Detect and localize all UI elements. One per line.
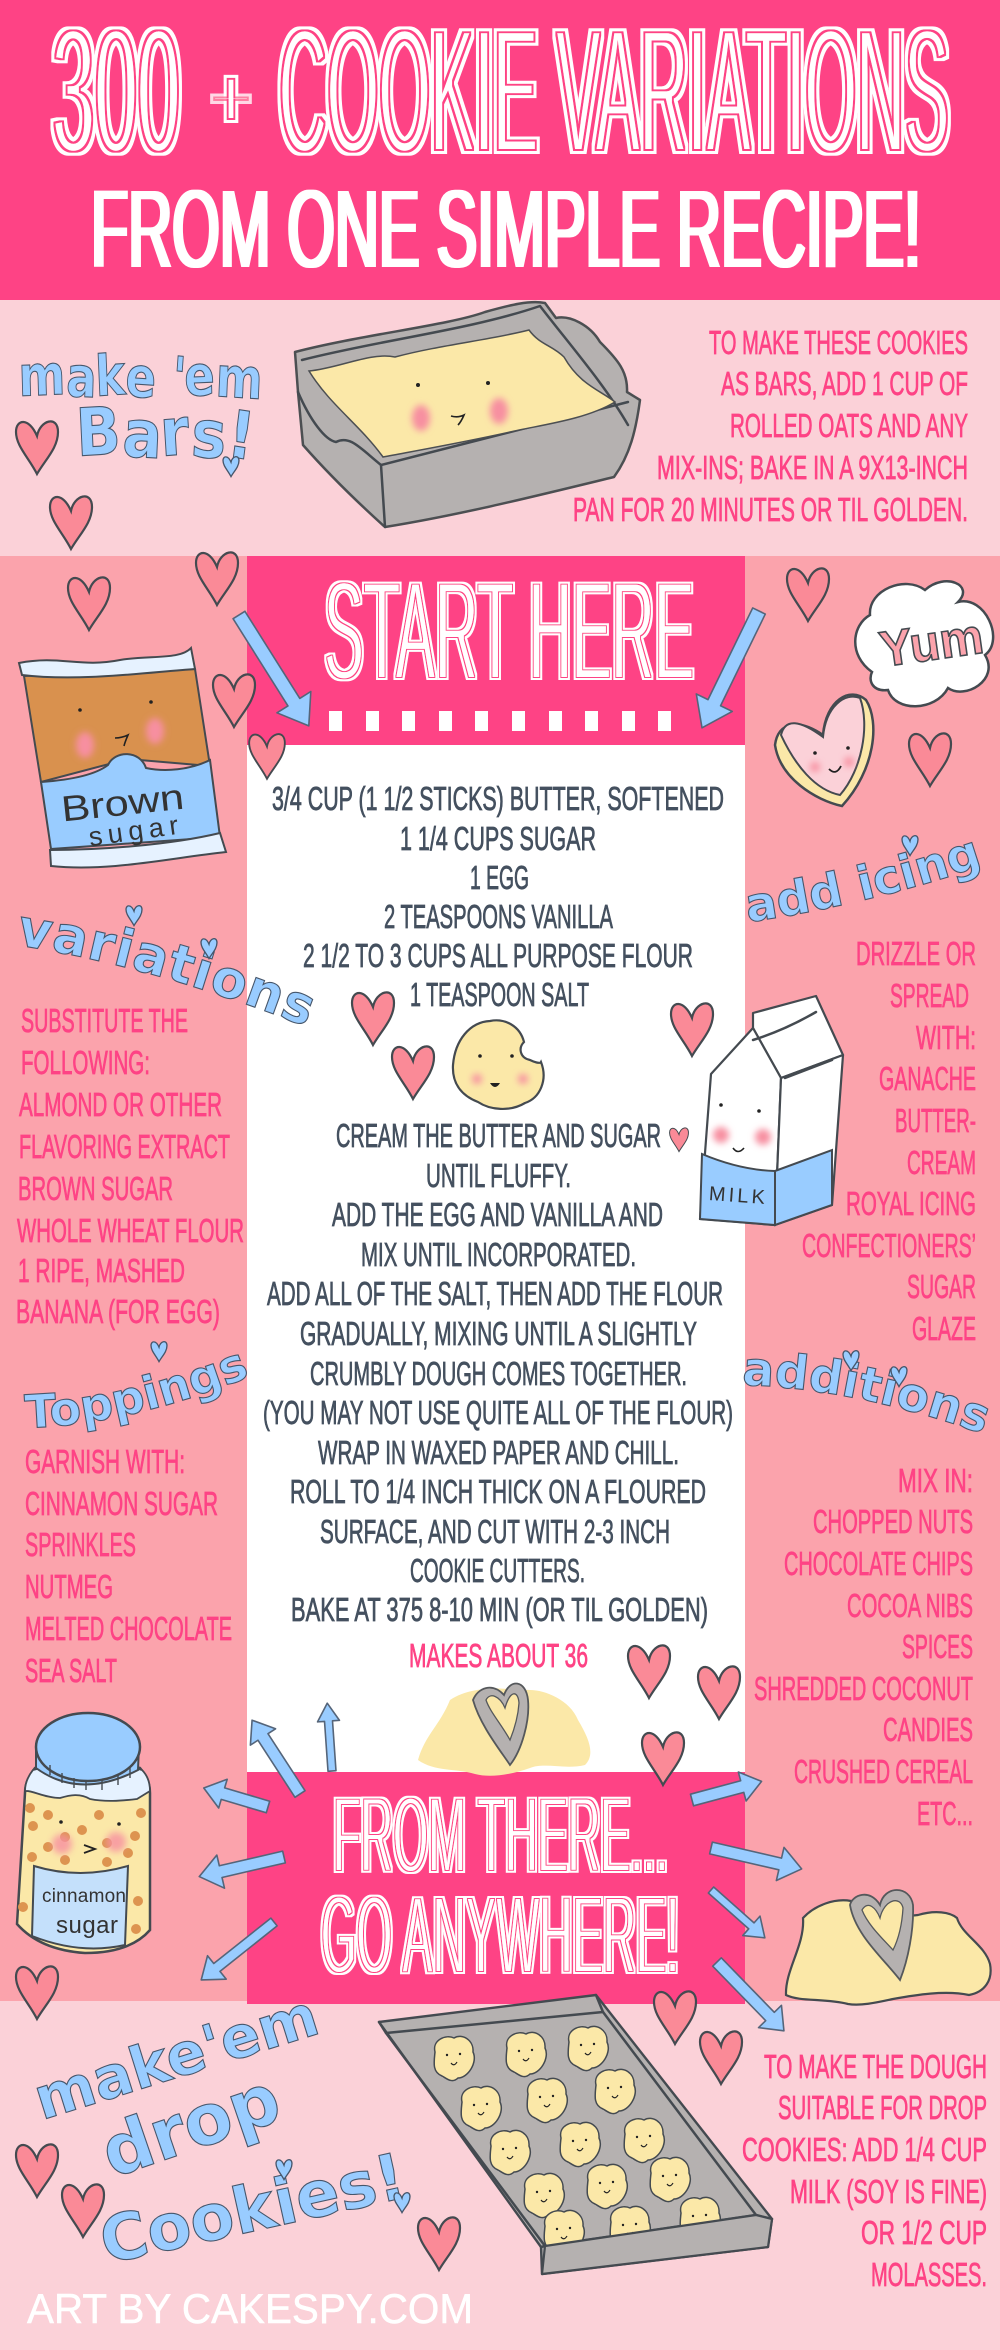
label: cinnamon sugar: sugar xyxy=(56,1912,118,1939)
arrows xyxy=(192,602,805,2042)
icon: dough with heart cutter, centre xyxy=(418,1684,590,1776)
heading: make 'em Bars! xyxy=(17,343,265,476)
icon: dough with heart cutter, right xyxy=(786,1890,991,2005)
icon: heart cookie with icing xyxy=(775,695,873,806)
recipe method: CREAM THE BUTTER AND SUGAR xyxy=(336,1117,661,1154)
icon: bitten cookie xyxy=(453,1020,544,1109)
heading: from there go anywhere xyxy=(321,1774,679,1997)
label: brown sugar: sugar xyxy=(87,810,180,852)
credit: ART BY CAKESPY.COM xyxy=(27,2285,473,2332)
icon: baking sheet with drop cookies xyxy=(379,1995,772,2274)
text: toppings list xyxy=(25,1443,232,1689)
panel: brown sugar bag xyxy=(19,648,226,867)
recipe ingredients: 1 TEASPOON SALT xyxy=(410,976,589,1013)
panel: toppings xyxy=(24,1354,247,1689)
text: variations list: 1 RIPE, MASHED xyxy=(18,1252,185,1289)
panel: add icing xyxy=(748,842,980,1347)
text: toppings list: SEA SALT xyxy=(25,1652,117,1689)
panel: make 'em bars xyxy=(17,302,968,528)
heading: make 'em drop cookies: Cookies! xyxy=(102,2152,400,2260)
recipe method: UNTIL FLUFFY. xyxy=(426,1157,571,1194)
text: variations list: WHOLE WHEAT FLOUR xyxy=(17,1212,244,1249)
recipe method: BAKE AT 375 8-10 MIN (OR TIL GOLDEN) xyxy=(291,1591,708,1628)
text: toppings list: CINNAMON SUGAR xyxy=(25,1485,218,1522)
heading: additions: additions xyxy=(744,1352,988,1432)
text: variations list: SUBSTITUTE THE xyxy=(21,1002,188,1039)
icon: bar baking pan xyxy=(295,302,640,527)
text: drop cookie instructions xyxy=(742,2048,987,2293)
recipe ingredients: 2 1/2 TO 3 CUPS ALL PURPOSE FLOUR xyxy=(303,937,693,974)
recipe method: (YOU MAY NOT USE QUITE ALL OF THE FLOUR) xyxy=(263,1394,733,1431)
text: additions list xyxy=(754,1462,973,1832)
text: variations list: BANANA (FOR EGG) xyxy=(16,1293,220,1330)
recipe method: GRADUALLY, MIXING UNTIL A SLIGHTLY xyxy=(300,1315,697,1352)
text: yield: MAKES ABOUT 36 xyxy=(409,1637,588,1674)
icon: milk carton xyxy=(700,996,843,1225)
recipe method: ADD THE EGG AND VANILLA AND xyxy=(332,1196,663,1233)
recipe method: CRUMBLY DOUGH COMES TOGETHER. xyxy=(310,1355,687,1392)
small blue hearts on lettering xyxy=(126,457,918,2213)
heading: make 'em Bars!: Bars! xyxy=(74,393,260,476)
icon: yum cloud: Yum xyxy=(876,608,987,678)
panel: additions xyxy=(744,1352,988,1832)
panel: variations xyxy=(16,916,314,1330)
label: milk: MILK xyxy=(708,1183,766,1209)
heading: make 'em drop cookies: drop xyxy=(106,2086,278,2174)
recipe method: MIX UNTIL INCORPORATED. xyxy=(361,1236,636,1273)
text: variations list xyxy=(16,1002,244,1330)
recipe ingredients xyxy=(272,780,724,1013)
text: toppings list: SPRINKLES xyxy=(25,1526,136,1563)
recipe method: ADD ALL OF THE SALT, THEN ADD THE FLOUR xyxy=(267,1275,723,1312)
drop cookies xyxy=(434,2026,720,2255)
recipe ingredients: 3/4 CUP (1 1/2 STICKS) BUTTER, SOFTENED xyxy=(272,780,724,817)
label: cinnamon sugar xyxy=(42,1886,126,1939)
icon: cinnamon sugar jar xyxy=(17,1713,150,1953)
title line 1: + xyxy=(212,49,250,149)
heading: make 'em Bars!: make 'em xyxy=(17,343,265,412)
heading: toppings: Toppings xyxy=(24,1354,247,1432)
recipe ingredients: 1 EGG xyxy=(470,859,529,896)
text: toppings list: MELTED CHOCOLATE xyxy=(25,1610,232,1647)
text: variations list: FOLLOWING: xyxy=(21,1044,150,1081)
recipe method: WRAP IN WAXED PAPER AND CHILL. xyxy=(318,1434,679,1471)
text: variations list: BROWN SUGAR xyxy=(18,1170,173,1207)
recipe ingredients: 2 TEASPOONS VANILLA xyxy=(384,898,613,935)
header banner xyxy=(0,0,1000,300)
from there banner xyxy=(247,1772,745,2004)
text: bars instructions xyxy=(573,324,968,528)
text: icing list xyxy=(802,935,976,1347)
heading: add icing: add icing xyxy=(748,842,980,922)
label: brown sugar: Brown xyxy=(59,776,186,829)
heading: variations: variations xyxy=(20,916,314,1024)
hearts xyxy=(16,421,951,2270)
recipe method xyxy=(263,1117,733,1628)
text: toppings list: GARNISH WITH: xyxy=(25,1443,185,1480)
heading: make 'em drop cookies: make'em xyxy=(36,2005,318,2120)
decorative squares row xyxy=(329,711,671,731)
recipe method: COOKIE CUTTERS. xyxy=(410,1552,585,1589)
recipe method: SURFACE, AND CUT WITH 2-3 INCH xyxy=(320,1513,670,1550)
text: variations list: ALMOND OR OTHER xyxy=(19,1086,222,1123)
label: brown sugar xyxy=(59,776,186,852)
text: variations list: FLAVORING EXTRACT xyxy=(19,1128,230,1165)
label: cinnamon sugar: cinnamon xyxy=(42,1886,126,1907)
icon: yum cloud xyxy=(855,581,993,706)
recipe ingredients: 1 1/4 CUPS SUGAR xyxy=(400,820,596,857)
heading: make 'em drop cookies xyxy=(36,2005,400,2260)
recipe method: ROLL TO 1/4 INCH THICK ON A FLOURED xyxy=(290,1473,706,1510)
text: toppings list: NUTMEG xyxy=(25,1568,113,1605)
start here banner xyxy=(247,552,745,745)
